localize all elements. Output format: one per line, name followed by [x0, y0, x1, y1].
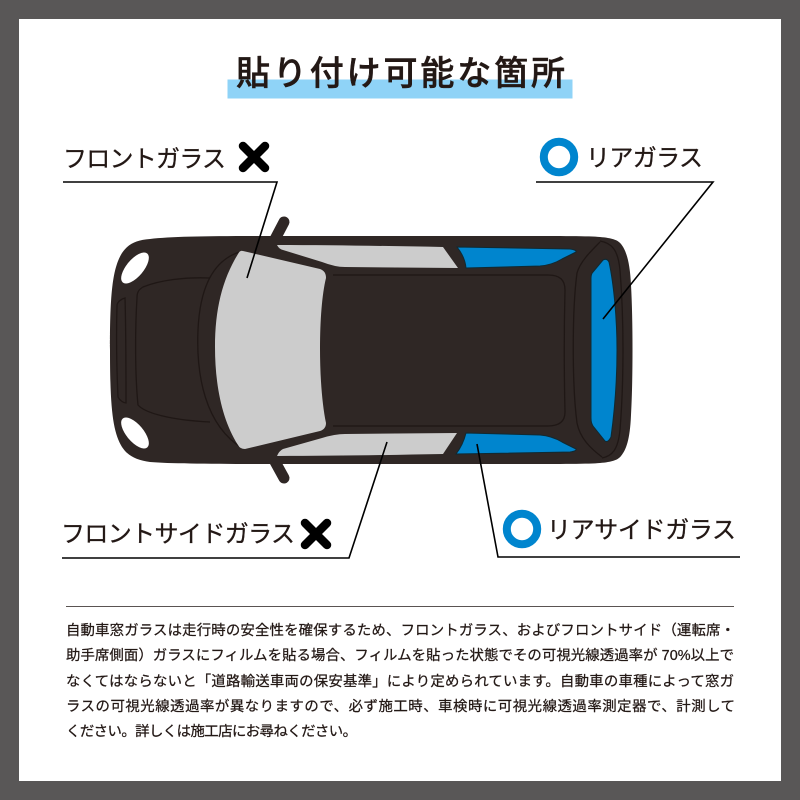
- car detail lines: [117, 241, 623, 458]
- front side glass: top: [277, 245, 458, 268]
- headlight: top: [116, 248, 154, 288]
- body text: 自動車窓ガラスは走行時の安全性を確保するため、フロントガラス、およびフロントサイド（運転席・: [66, 622, 735, 639]
- divider: [66, 606, 734, 607]
- rear window: [591, 259, 617, 442]
- icon: circle, rear side glass: [507, 514, 537, 544]
- rear side glass: top: [457, 247, 576, 268]
- mirror: bottom: [255, 450, 284, 478]
- front side glass: bottom: [277, 433, 457, 456]
- headlight: bottom: [116, 413, 154, 453]
- title: 貼り付け可能な箇所: [236, 55, 565, 93]
- front windshield: [215, 251, 326, 449]
- icon: circle, rear glass: [544, 142, 574, 172]
- label: rear side glass: リアサイドガラス: [547, 517, 736, 544]
- body text: ラスの可視光線透過率が異なりますので、必ず施工時、車検時に可視光線透過率測定器で、計測して: [66, 698, 735, 715]
- label: front side glass: フロントサイドガラス: [61, 521, 295, 548]
- mirror: top: [257, 222, 284, 252]
- leader line: front glass: [63, 182, 277, 278]
- label: front glass: フロントガラス: [63, 146, 226, 173]
- rear side glass: bottom: [456, 433, 576, 454]
- leader line: front side glass: [62, 442, 387, 558]
- leader line: rear side glass: [477, 444, 740, 557]
- body text: ください。詳しくは施工店にお尋ねください。: [66, 723, 357, 740]
- body text: [66, 622, 735, 740]
- label: rear glass: リアガラス: [586, 145, 703, 172]
- body text: なくてはならないと「道路輸送車両の保安基準」により定められています。自動車の車種によって窓ガ: [66, 673, 734, 690]
- car illustration: [110, 222, 632, 478]
- icon: cross, front glass: [243, 146, 265, 168]
- body text: 助手席側面）ガラスにフィルムを貼る場合、フィルムを貼った状態でその可視光線透過率が 70%以上で: [66, 647, 734, 664]
- leader line: rear glass: [536, 182, 713, 319]
- icon: cross, front side glass: [305, 523, 327, 545]
- car body: [110, 236, 632, 464]
